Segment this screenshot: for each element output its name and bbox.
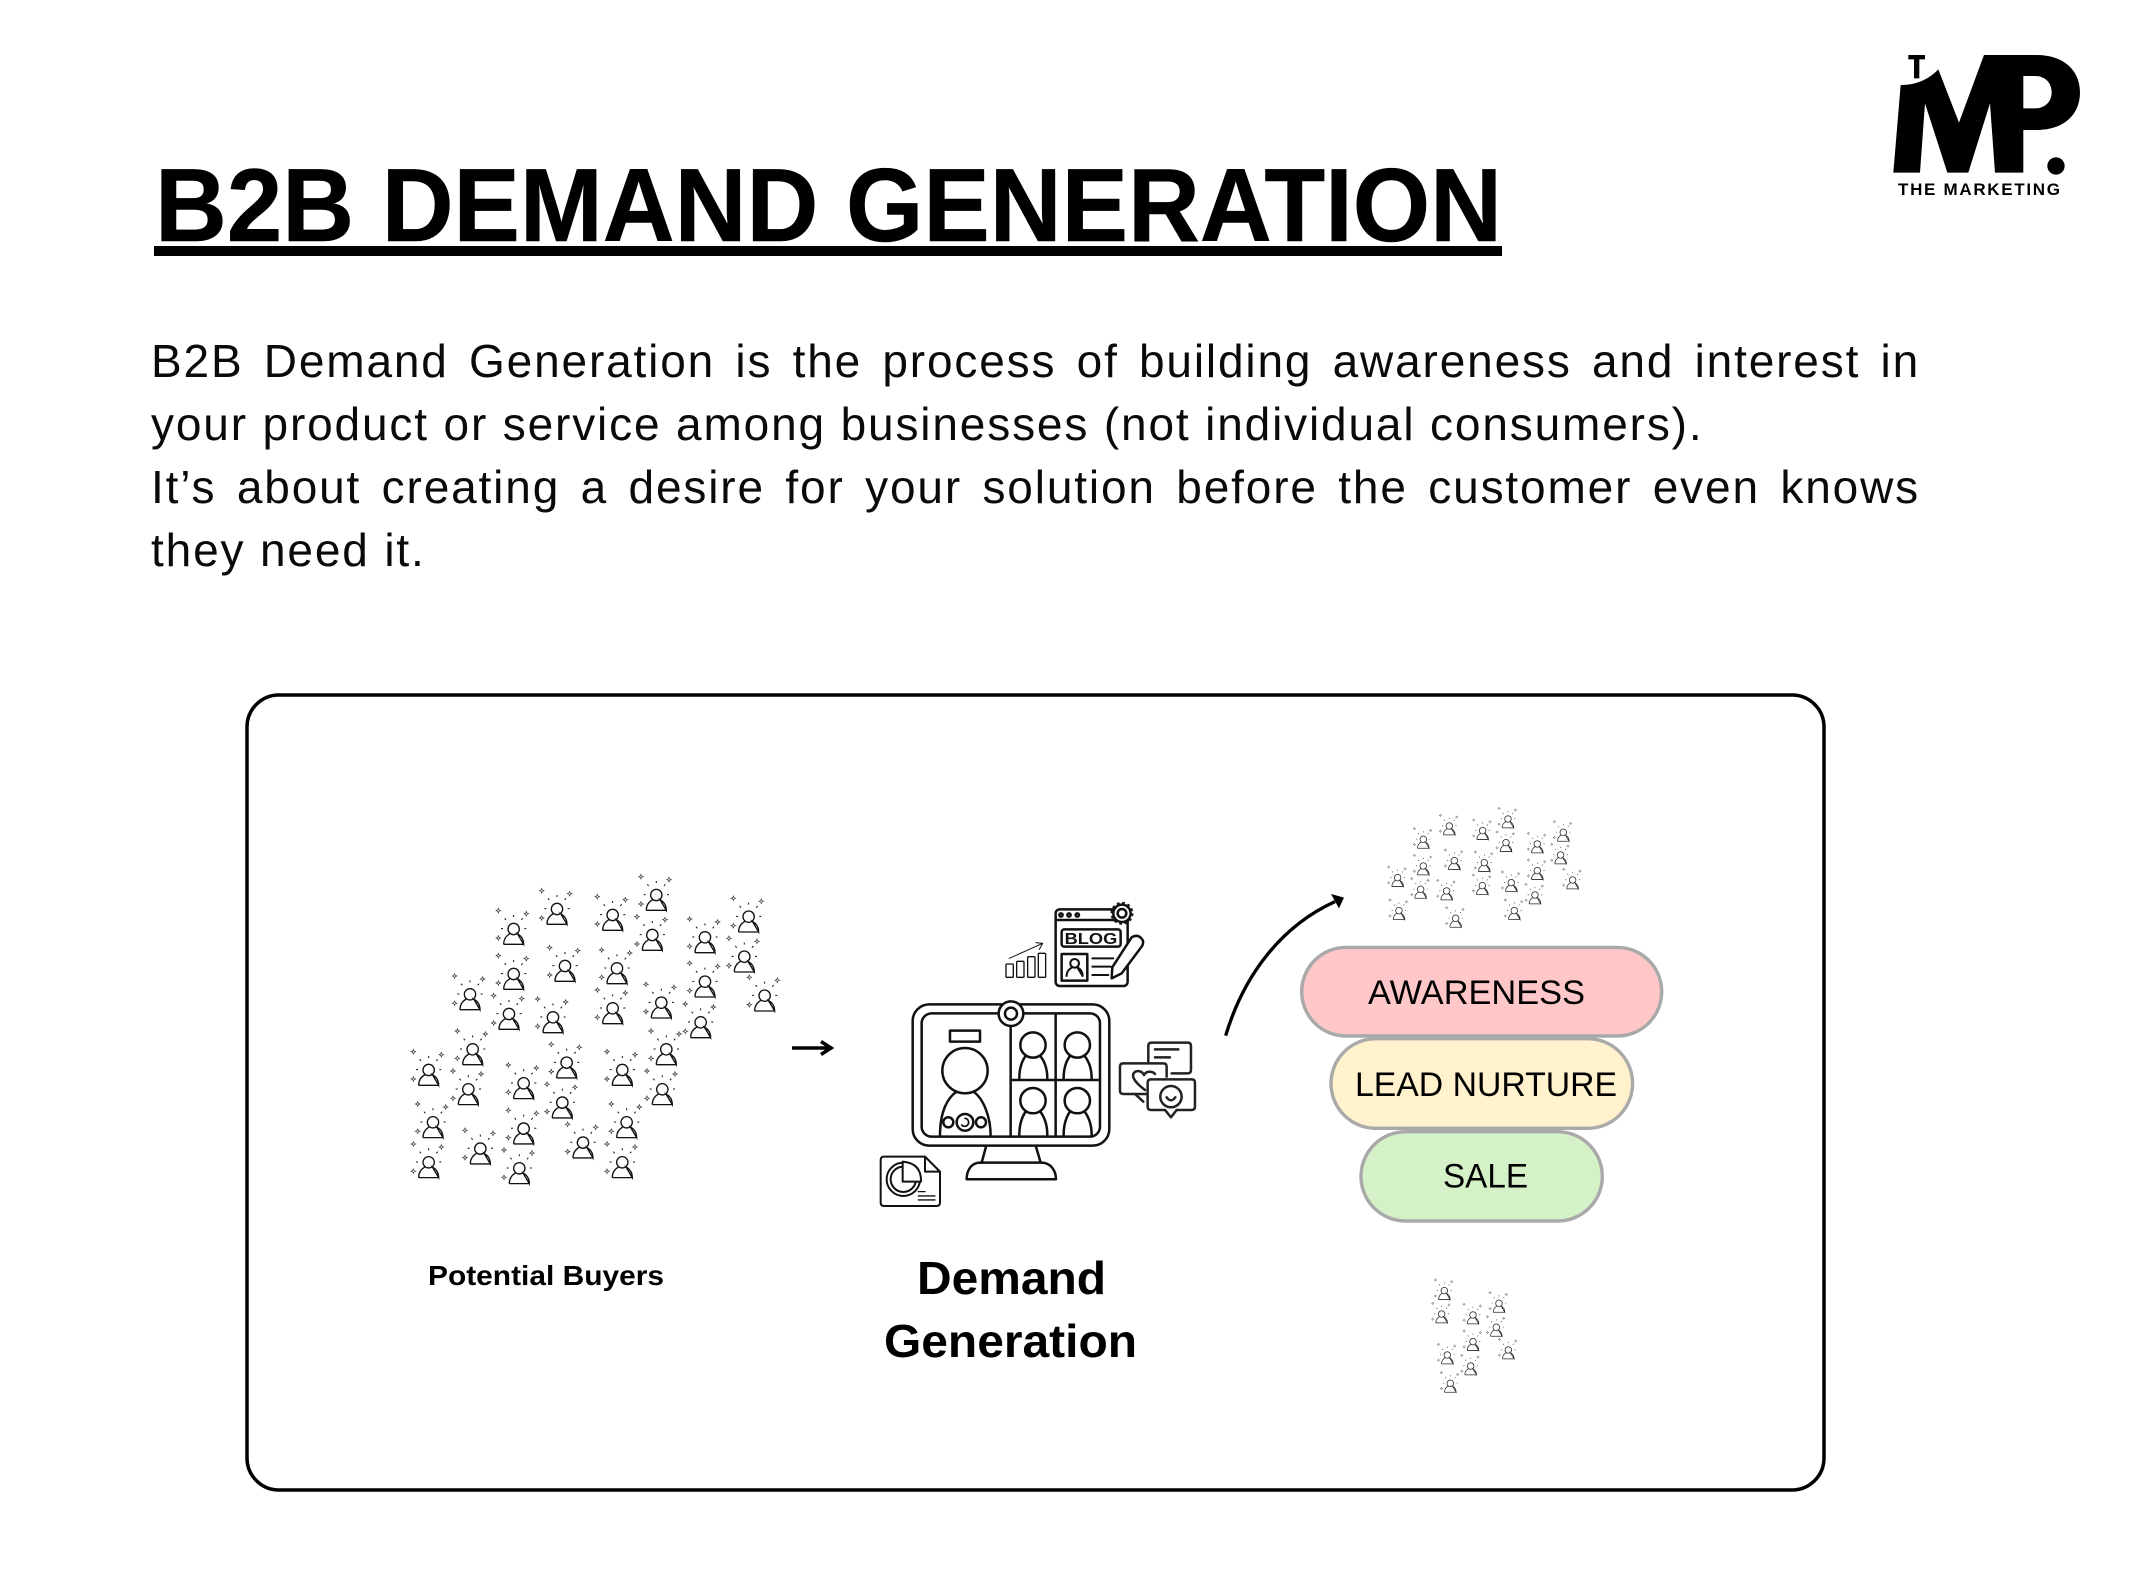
body text: definition paragraph: they need it.: [151, 524, 426, 576]
icon: growth chart: [1006, 943, 1046, 977]
icon group: potential buyers crowd: [411, 874, 780, 1184]
title: B2B DEMAND GENERATION: [155, 148, 1502, 264]
icon group: engaged buyers above funnel: [1387, 807, 1581, 927]
pill: sale: SALE: [1443, 1158, 1528, 1196]
label: demand generation: Generation: [884, 1315, 1137, 1367]
icon: pie chart document: [881, 1157, 940, 1206]
pill: lead nurture: [1331, 1039, 1633, 1128]
pill: sale: [1361, 1132, 1602, 1221]
pill: lead nurture: LEAD NURTURE: [1355, 1066, 1617, 1104]
arrow: curved arrow to funnel top: [1226, 894, 1344, 1036]
body text: definition paragraph: B2B Demand Generation is the process of building awareness and interest in: [151, 335, 1920, 387]
label: demand generation: Demand: [917, 1252, 1106, 1304]
icon: blog window: [1056, 903, 1143, 986]
pill: awareness: [1302, 947, 1662, 1036]
icon group: converted buyers below funnel: [1431, 1279, 1517, 1392]
logo: The Marketing MP: [1893, 55, 2080, 199]
logo: The Marketing MP: THE MARKETING: [1898, 180, 2060, 199]
label: demand generation: [884, 1252, 1137, 1367]
pill: awareness: AWARENESS: [1368, 974, 1585, 1012]
icon: chat bubbles: [1120, 1043, 1195, 1117]
icon cluster: demand generation: [881, 903, 1195, 1206]
icon: blog window: BLOG: [1065, 931, 1117, 948]
body text: definition paragraph: your product or service among businesses (not individual consumers).: [151, 398, 1703, 450]
arrow: buyers to demand generation: [792, 1042, 831, 1054]
icon: video call monitor: [913, 1001, 1109, 1179]
panel: diagram frame: [247, 695, 1824, 1490]
body text: definition paragraph: It’s about creating a desire for your solution before the customer even knows: [151, 461, 1920, 513]
body text: definition paragraph: [151, 335, 1920, 576]
funnel: awareness, lead nurture, sale: [1302, 947, 1662, 1221]
label: potential buyers: Potential Buyers: [428, 1260, 664, 1291]
